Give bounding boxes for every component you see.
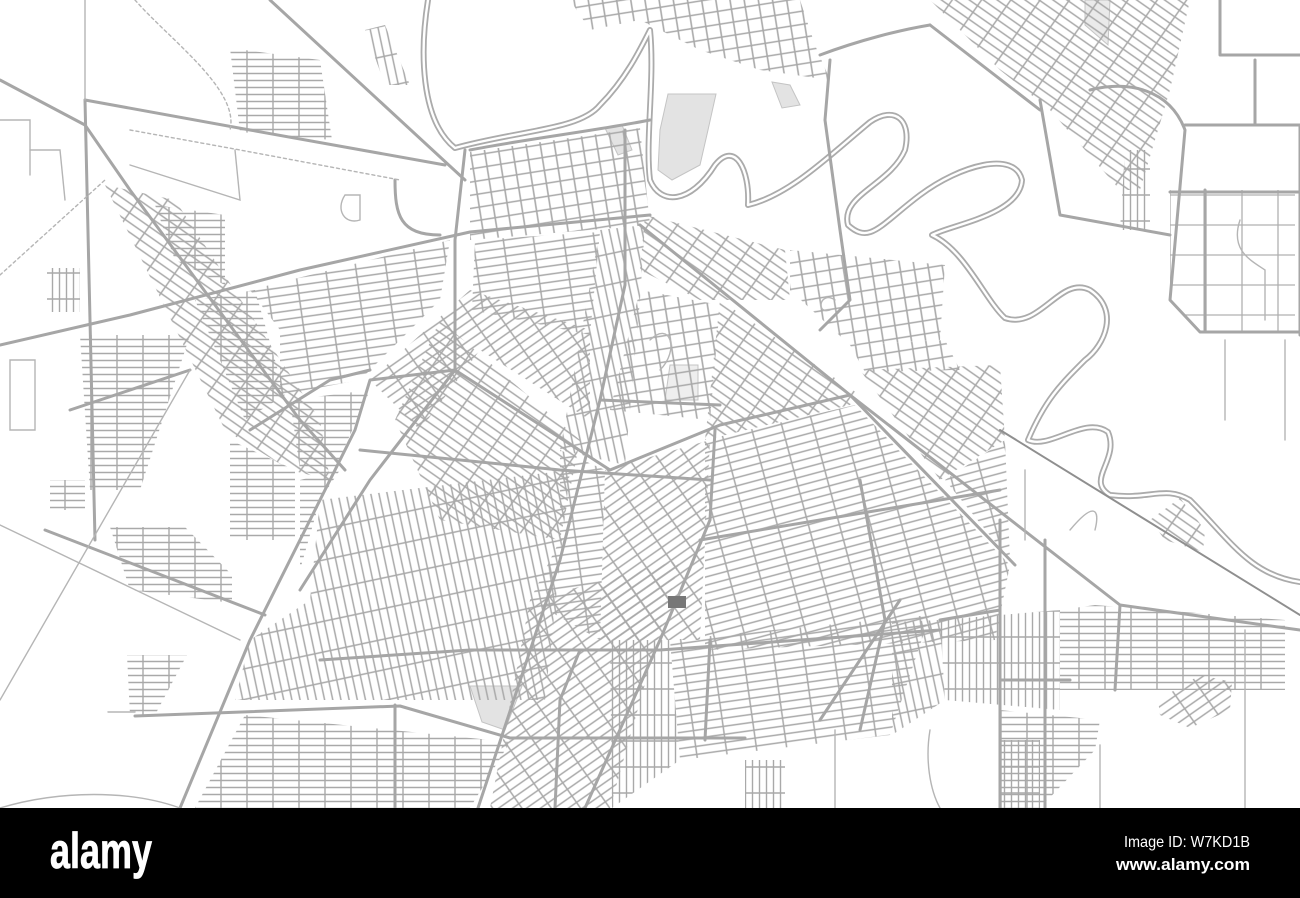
building block: [668, 596, 686, 608]
footer bar: [0, 808, 1300, 898]
website: www.alamy.com: [1115, 855, 1250, 874]
parks and water areas: [470, 0, 1110, 730]
alamy logo: alamy: [50, 823, 152, 879]
image id: Image ID: W7KD1B: [1124, 834, 1250, 851]
rivers: [424, 0, 1300, 582]
